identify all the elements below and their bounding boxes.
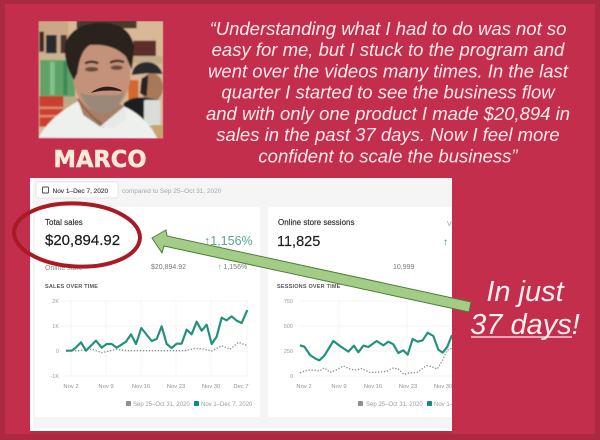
moustache: [91, 87, 123, 93]
callout: in just 37 days: [470, 276, 580, 341]
line chart: sessions over time: Nov 2: [296, 384, 312, 390]
line chart: sessions over time: Nov 30: [434, 384, 452, 390]
line chart: sessions over time: 500: [284, 324, 293, 330]
date range selector: Nov 1–Dec 7, 2020: [52, 188, 109, 195]
panel: total sales card: $20,894.92: [151, 264, 186, 271]
name: MARCO: MARCO: [54, 147, 146, 173]
testimonial quote: [206, 18, 570, 166]
testimonial quote: quarter I started to see the business flow: [221, 82, 556, 103]
panel: total sales card: [35, 207, 260, 417]
date range selector: [36, 182, 222, 198]
panel: total sales card: SALES OVER TIME: [45, 284, 98, 290]
line chart: sessions over time: 0: [290, 374, 293, 380]
panel: online store sessions card: [268, 207, 486, 417]
panel: online store sessions card: 10,999: [393, 264, 415, 271]
line chart: sessions over time: 750: [284, 299, 293, 305]
testimonial quote: “Understanding what I had to do was not so: [210, 18, 566, 39]
panel: total sales card: ↑ 1,156%: [218, 264, 247, 271]
line chart: sessions over time: Nov 23: [399, 384, 417, 390]
line chart: sales over time: 2K: [52, 299, 59, 305]
dashboard screenshot: [30, 178, 486, 431]
testimonial quote: sales in the past 37 days. Now I feel more: [216, 124, 560, 145]
panel: total sales card: Online store: [45, 265, 83, 272]
chart legend: [126, 401, 253, 408]
line chart: sales over time: Nov 16: [132, 384, 150, 390]
highlight ellipse around total sales: [12, 200, 142, 270]
testimonial quote: and with only one product I made $20,894 in: [206, 103, 570, 124]
line chart: sales over time: 1K: [52, 324, 59, 330]
chart legend: Sep 25–Oct 31, 2020: [366, 402, 423, 408]
chart legend: Nov 1–Dec 7, 2020: [434, 402, 486, 408]
right red panel: [30, 170, 595, 434]
panel: total sales card: ↑1,156%: [204, 234, 253, 248]
line chart: sales over time: [50, 299, 249, 390]
line chart: sales over time: 0: [56, 349, 59, 355]
panel: total sales card: $20,894.92: [45, 232, 120, 249]
portrait photo of Marco: [38, 21, 163, 139]
line chart: sales over time: -1K: [50, 374, 59, 380]
line chart: sales over time: Nov 2: [63, 384, 79, 390]
line chart: sessions over time: Nov 9: [331, 384, 347, 390]
line chart: sessions over time: [284, 299, 458, 390]
testimonial quote: confident to scale the business”: [258, 145, 518, 166]
panel: online store sessions card: SESSIONS OVER TIME: [277, 284, 341, 290]
line chart: sessions over time: Nov 16: [364, 384, 382, 390]
line chart: sales over time: Dec 7: [233, 384, 249, 390]
green arrow pointing to total sales: [152, 230, 471, 312]
line chart: sales over time: Nov 30: [202, 384, 220, 390]
panel: online store sessions card: 11,825: [277, 234, 320, 250]
callout: in just 37 days: In just: [486, 276, 566, 308]
line chart: sessions over time: 250: [284, 349, 293, 355]
panel: online store sessions card: V: [447, 221, 452, 228]
line chart: sales over time: Nov 23: [167, 384, 185, 390]
testimonial quote: easy for me, but I stuck to the program and: [212, 39, 565, 60]
panel: online store sessions card: Online store sessions: [278, 218, 354, 227]
line chart: sales over time: Nov 9: [98, 384, 114, 390]
callout: in just 37 days: 37 days!: [470, 309, 580, 341]
testimonial quote: went over the videos many times. In the last: [208, 60, 569, 81]
panel: total sales card: Total sales: [45, 218, 83, 227]
date range selector: compared to Sep 25–Oct 31, 2020: [122, 188, 222, 195]
chart legend: [358, 401, 486, 408]
chart legend: Nov 1–Dec 7, 2020: [201, 402, 253, 408]
panel: online store sessions card: ↑: [443, 237, 448, 248]
chart legend: Sep 25–Oct 31, 2020: [133, 402, 190, 408]
